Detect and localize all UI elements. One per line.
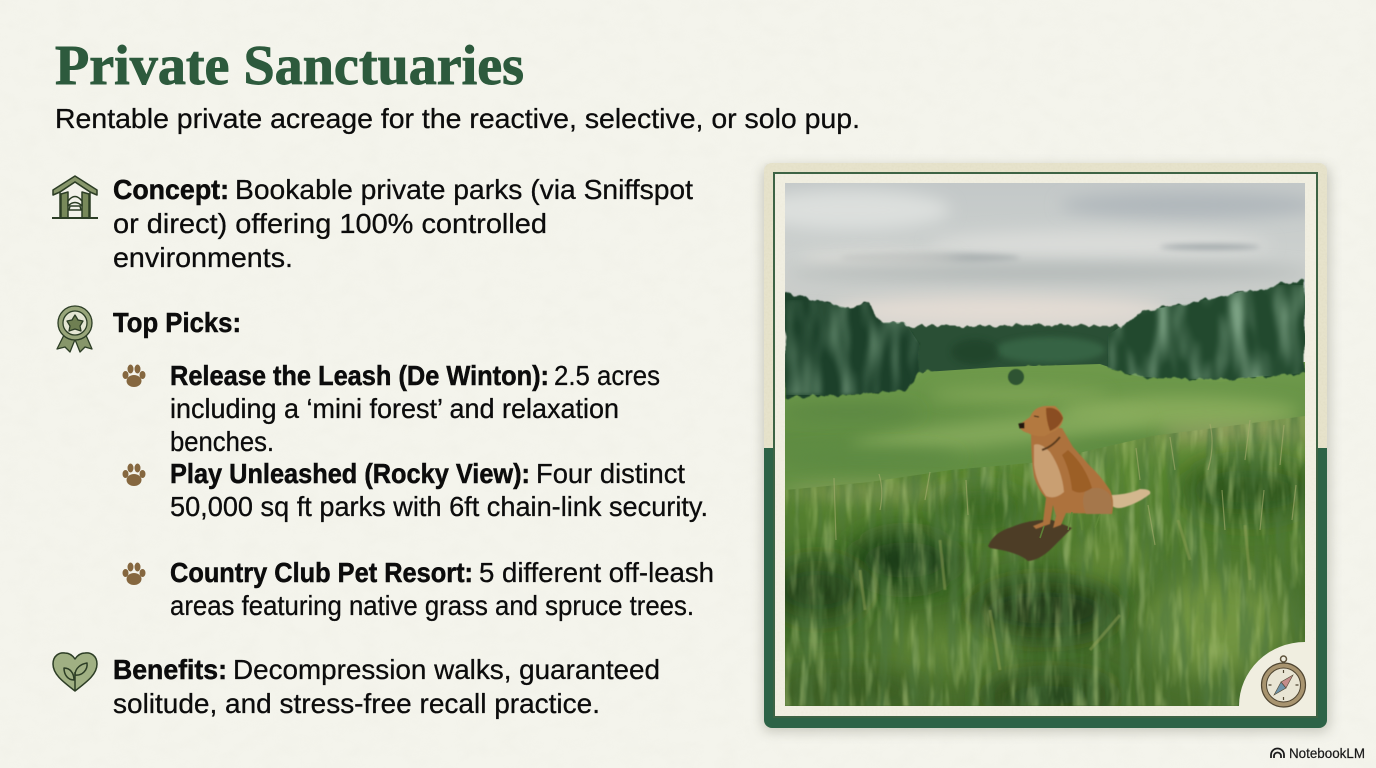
nose and eye — [1019, 416, 1039, 428]
icon: compass — [1262, 656, 1306, 707]
frame: cream and green border — [764, 163, 1327, 728]
icon: paw — [122, 364, 146, 387]
collar — [1042, 437, 1060, 450]
meadow — [785, 364, 1288, 490]
tail — [1112, 489, 1150, 508]
icon: paw — [122, 562, 146, 585]
pick: Country Club Pet Resort: 5 different off-leash — [479, 557, 714, 588]
concept text: Concept: — [113, 174, 229, 205]
foreground grass — [785, 416, 1305, 706]
right trees — [1108, 280, 1305, 380]
framed photo — [750, 163, 1330, 732]
benefits text — [113, 654, 660, 719]
pick: Release the Leash: Release the Leash (De Winton): — [170, 360, 549, 391]
chest highlight — [1034, 444, 1064, 497]
pick: Play Unleashed — [122, 458, 708, 522]
green ground base — [785, 362, 1305, 398]
grass blades — [834, 420, 1296, 545]
NotebookLM badge: NotebookLM — [1289, 745, 1365, 761]
left trees — [785, 293, 920, 398]
photo: dog in meadow — [785, 183, 1305, 706]
icon: award rosette — [57, 306, 92, 352]
benefits section — [53, 653, 660, 719]
top picks section — [57, 306, 714, 621]
pick: Play Unleashed: Play Unleashed (Rocky View): — [170, 458, 530, 489]
sky — [750, 183, 1320, 343]
top picks heading: Top Picks: — [113, 307, 241, 338]
body — [1031, 428, 1113, 529]
pick: Play Unleashed: 50,000 sq ft parks with 6ft chain-link security. — [170, 491, 708, 522]
dog — [1019, 406, 1150, 529]
benefits text: Benefits: — [113, 654, 227, 685]
corner tab with compass — [1239, 642, 1316, 716]
concept text: environments. — [113, 242, 293, 273]
ear — [1046, 408, 1063, 431]
pick: Release the Leash: 2.5 acres — [554, 360, 660, 391]
pick: Country Club Pet Resort: areas featuring native grass and spruce trees. — [170, 590, 694, 621]
pick: Play Unleashed: Four distinct — [536, 458, 685, 489]
icon: NotebookLM logo — [1271, 748, 1284, 758]
dirt mound — [988, 520, 1072, 561]
grass over dog feet — [1040, 512, 1100, 538]
icon: paw — [122, 464, 146, 486]
haunch — [1083, 488, 1112, 514]
concept text — [113, 174, 693, 273]
head — [1019, 406, 1063, 436]
concept text: Bookable private parks (via Sniffspot — [235, 174, 693, 205]
pick: Release the Leash: benches. — [170, 426, 274, 457]
title: Private Sanctuaries — [55, 35, 524, 97]
subtitle: Rentable private acreage for the reactive, selective, or solo pup. — [55, 103, 860, 134]
benefits text: solitude, and stress-free recall practice. — [113, 688, 600, 719]
pick: Country Club Pet Resort — [122, 557, 714, 621]
icon: heart with leaf — [53, 653, 97, 691]
icon: park gate — [52, 176, 98, 218]
distant tree line — [900, 325, 1125, 372]
concept text: or direct) offering 100% controlled — [113, 208, 547, 239]
pick: Release the Leash — [122, 360, 660, 457]
bush — [1008, 369, 1024, 385]
benefits text: Decompression walks, guaranteed — [233, 654, 660, 685]
concept section — [52, 174, 693, 273]
pick: Country Club Pet Resort: Country Club Pet Resort: — [170, 557, 473, 588]
pick: Release the Leash: including a ‘mini forest’ and relaxation — [170, 393, 619, 424]
